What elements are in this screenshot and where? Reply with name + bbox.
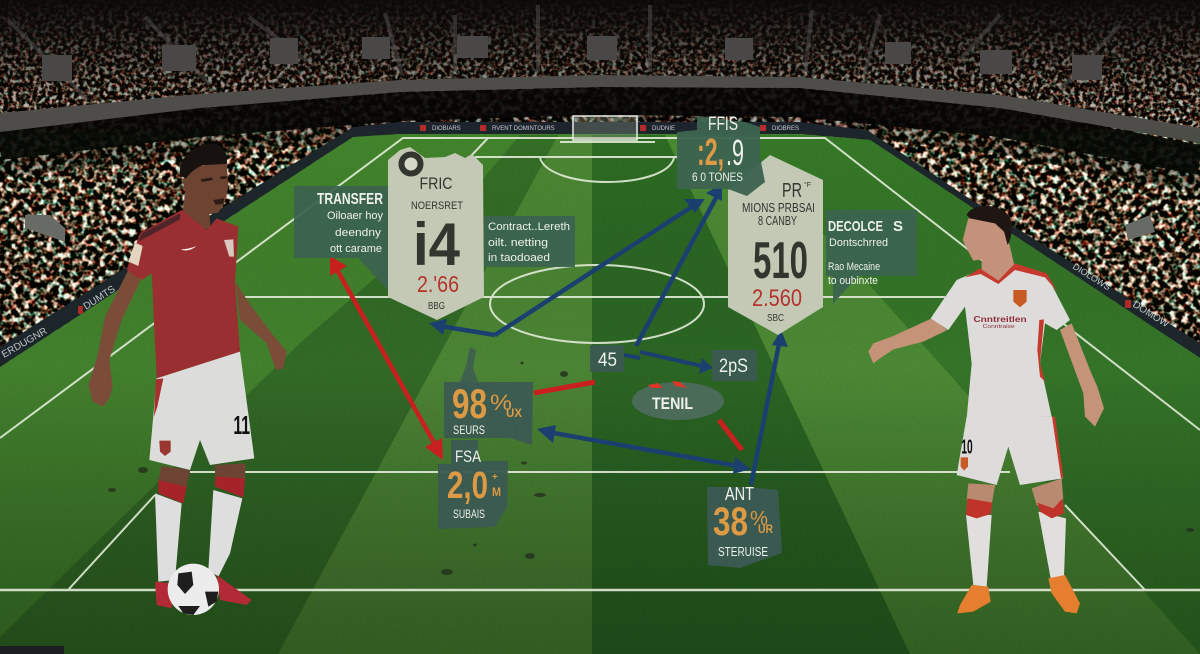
stat: 45: 45 <box>598 350 617 371</box>
panel: right player tag: PR <box>782 180 802 202</box>
stat: ANT: ANT <box>725 484 754 504</box>
panel: right player tag: 2.560 <box>752 285 802 312</box>
advertising boards: DUMTS <box>82 284 118 313</box>
advertising boards: DIOLOWS <box>1071 261 1112 292</box>
goal <box>573 116 637 140</box>
stat: ANT <box>707 484 782 568</box>
right player socks <box>966 512 1066 587</box>
advertising boards: DOMOW <box>1130 299 1171 330</box>
arrows: red segments <box>534 382 742 450</box>
right player shorts <box>957 417 1063 485</box>
left player shorts <box>149 352 254 470</box>
arrow: blue centre to FFIS <box>636 184 722 346</box>
panel: transfer callout: TRANSFER <box>317 191 383 208</box>
left player hair <box>180 143 227 179</box>
light centre-left stripe <box>278 135 592 654</box>
panel: declice callout: to oubinxte <box>828 275 878 287</box>
player: right, white shirt: Cnntreitlen <box>973 314 1027 324</box>
stat: 45 <box>590 345 624 372</box>
stat: 98%: UX <box>506 406 522 420</box>
lower stand crowd <box>0 85 1200 375</box>
panel: declice callout: S <box>893 218 903 235</box>
panel: transfer callout: Oiloaer hoy <box>327 210 383 222</box>
arrow: blue ANT to tag <box>751 330 788 485</box>
stat: FSA: 2,0 <box>447 465 488 507</box>
dark left stripe <box>0 135 558 654</box>
pitch lines <box>0 138 1200 590</box>
stat: FSA: FSA <box>455 447 482 466</box>
stat: FSA: + <box>492 472 498 483</box>
left player shirt <box>127 210 240 378</box>
panel: right player tag: MIONS PRBSAI <box>742 200 815 215</box>
advertising boards: ERDUGNR <box>0 326 49 361</box>
panel: contract callout: oilt. netting <box>488 237 548 249</box>
advertising boards: DIOBRES <box>772 126 799 132</box>
right player legs <box>967 478 1063 518</box>
advertising boards <box>0 122 1200 367</box>
stat: FSA: SUBAIS <box>453 507 485 521</box>
arrow: red transfer link <box>330 256 443 460</box>
left player boots <box>155 575 252 608</box>
panel: left player tag: FRIC <box>420 174 452 193</box>
panel: FFIS stat: .9 <box>726 132 744 173</box>
panel: left player tag: 2.'66 <box>417 271 459 297</box>
badge: TENIL: TENIL <box>652 394 693 413</box>
stat: FSA: M <box>492 485 501 499</box>
panel: declice callout <box>826 210 917 304</box>
panel: right player tag: 510 <box>753 232 808 290</box>
player: right, white shirt: Conntraise <box>983 324 1015 330</box>
panel: declice callout: Dontschrred <box>829 237 888 249</box>
panel: transfer callout: ott carame <box>330 243 382 255</box>
left player arms <box>88 270 287 407</box>
stat: ANT: STERUISE <box>718 544 768 559</box>
dark far-right stripe <box>735 135 1200 654</box>
icon: tag ring <box>402 154 420 174</box>
stat: ANT: % <box>750 508 768 530</box>
right player neck and face <box>963 218 1015 283</box>
left player face details <box>201 176 227 205</box>
panel: declice callout: DECOLCE <box>828 218 883 235</box>
stat: ANT: UR <box>758 522 773 536</box>
right player shirt <box>931 265 1070 418</box>
pitch dirt marks <box>108 362 1194 575</box>
arrow: blue double-headed <box>537 425 751 474</box>
arrow: blue centre to 2pS <box>624 352 713 374</box>
panel: contract callout: Contract..Lereth <box>488 221 570 233</box>
panel: left player tag: BBG <box>428 301 445 312</box>
panel: FFIS stat: :2, <box>697 132 724 174</box>
player: left, red shirt <box>88 143 287 608</box>
left player legs <box>158 463 246 487</box>
advertising boards: DUDNIE <box>652 126 675 132</box>
panel: left player tag <box>388 147 484 320</box>
panel: left player tag: i4 <box>413 211 461 278</box>
panel: contract callout <box>484 216 575 267</box>
panel: FFIS stat: FFIS <box>708 114 738 135</box>
corner watermark bar <box>0 646 64 654</box>
advertising boards: DIOBIARS <box>432 126 461 132</box>
panel: transfer callout <box>294 186 388 290</box>
player: left, red shirt: 11 <box>233 410 250 440</box>
panel: FFIS stat <box>677 114 765 196</box>
stat: 98%: 98 <box>452 380 487 427</box>
stadium tier band <box>0 75 1200 143</box>
stat: 98%: SEURS <box>453 423 485 437</box>
stat: 2pS: 2pS <box>719 356 748 377</box>
upper stand crowd <box>0 0 1200 135</box>
player: right, white shirt <box>868 206 1104 613</box>
panel: contract callout: in taodoaed <box>488 252 550 264</box>
stat: ANT: 38 <box>713 500 748 544</box>
left player socks <box>155 490 242 582</box>
advertising boards: RVENT DOMINTOURS <box>492 126 555 132</box>
panel: transfer callout: deendny <box>335 227 382 239</box>
panel: declice callout: Rao Mecaine <box>828 261 880 273</box>
stat: 2pS <box>712 350 757 381</box>
arrow: blue tag to FFIS <box>429 199 705 335</box>
left player head <box>183 163 228 230</box>
stat: FSA <box>438 440 508 529</box>
panel: right player tag: °F <box>804 181 811 189</box>
light right stripe <box>665 135 1200 654</box>
right player boots <box>957 575 1080 613</box>
stat: 98%: % <box>490 390 512 415</box>
small silhouette on pitch <box>460 347 478 382</box>
player: right, white shirt: 10 <box>961 435 973 458</box>
right player arms <box>868 318 1104 427</box>
dark centre stripe <box>592 135 910 654</box>
panel: right player tag: 8 CANBY <box>758 213 797 228</box>
panel: FFIS stat: 6 0 TONES <box>692 170 743 184</box>
panel: right player tag <box>728 155 823 335</box>
football <box>168 564 219 615</box>
right player hair <box>967 206 1012 245</box>
panel: right player tag: SBC <box>767 313 784 324</box>
stat: 98% <box>444 380 533 445</box>
panel: left player tag: NOERSRET <box>411 200 463 212</box>
badge: TENIL <box>632 381 724 420</box>
